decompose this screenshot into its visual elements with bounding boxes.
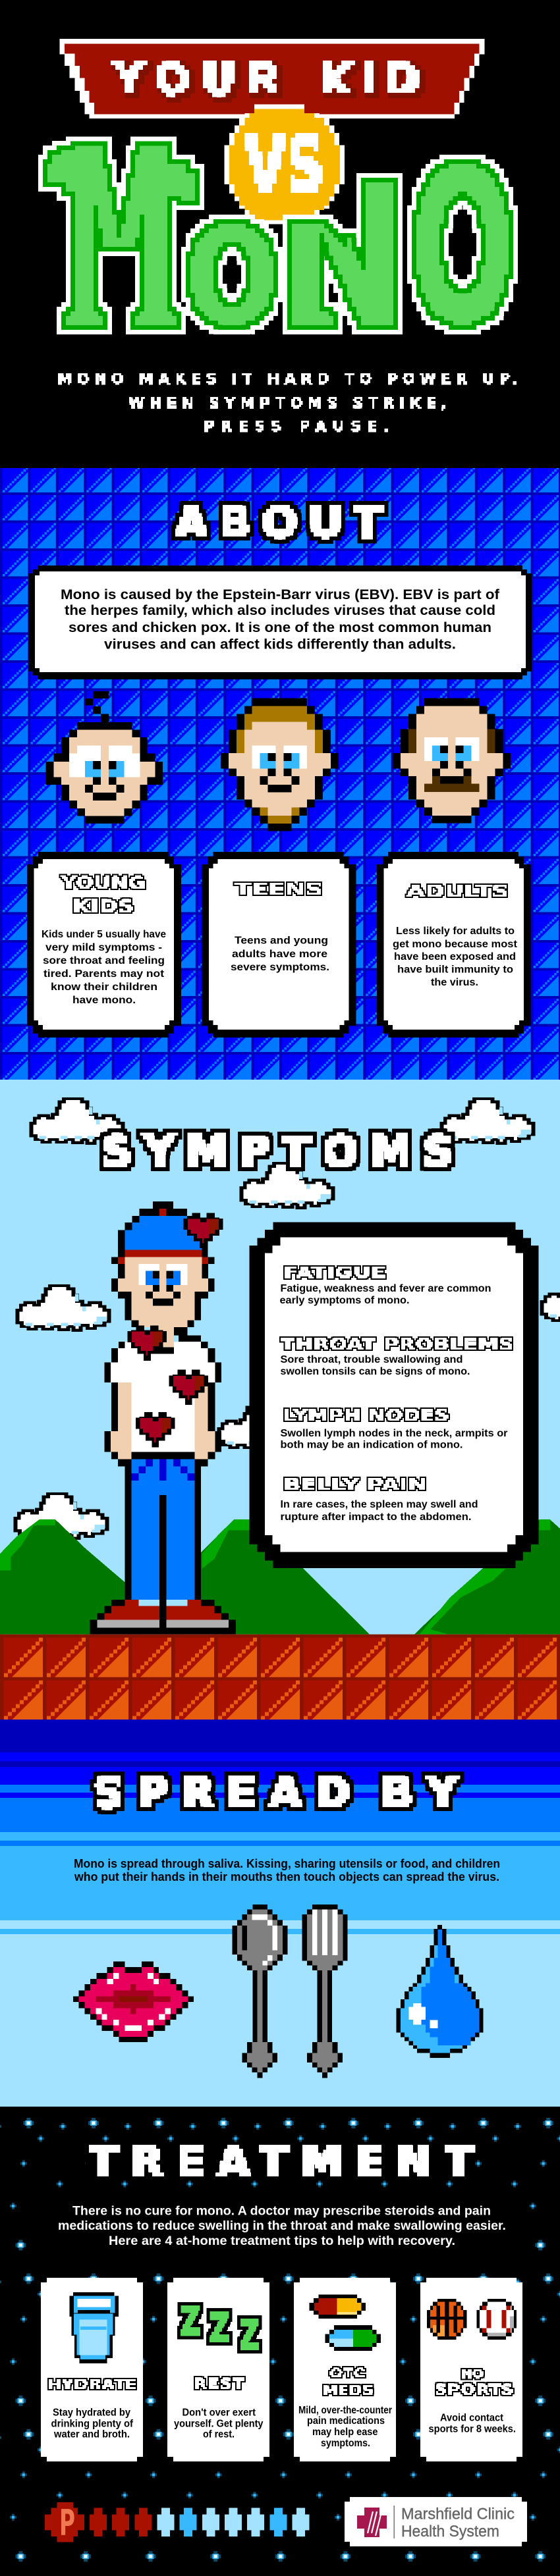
clouds bbox=[15, 1099, 560, 1538]
treatment paragraph: medications to reduce swelling in the throat and make swallowing easier. bbox=[58, 2219, 506, 2233]
adults text bbox=[393, 926, 518, 988]
otc meds text bbox=[298, 2405, 392, 2449]
symptom: belly pain: BELLY PAIN bbox=[283, 1475, 427, 1494]
panel: hydrate card bbox=[41, 2278, 143, 2461]
heading: young kids bbox=[61, 874, 146, 916]
heading: otc meds bbox=[322, 2366, 374, 2398]
icon: young kid face bbox=[45, 691, 163, 824]
icon: lips bbox=[73, 1962, 194, 2042]
symptom: belly pain: rupture after impact to the abdomen. bbox=[281, 1511, 472, 1523]
teens text bbox=[231, 935, 329, 973]
icon: hearts bbox=[128, 1213, 223, 1447]
icon: spoon bbox=[232, 1905, 287, 2078]
heading: young kids: YOUNG bbox=[61, 874, 146, 893]
teens text: severe symptoms. bbox=[231, 962, 329, 973]
otc meds text: pain medications bbox=[307, 2415, 385, 2427]
pause progress bar bbox=[40, 2498, 315, 2544]
about paragraph: the herpes family, which also includes viruses that cause cold bbox=[65, 603, 495, 618]
young kids text: tired. Parents may not bbox=[43, 968, 165, 980]
teens text: adults have more bbox=[232, 949, 327, 960]
hydrate text bbox=[51, 2407, 134, 2440]
symptom: lymph nodes bbox=[281, 1406, 507, 1451]
heading: your kid: YOUR bbox=[113, 55, 279, 103]
panel: rest card bbox=[167, 2278, 269, 2461]
panel: about background bbox=[0, 468, 560, 1080]
no sports text bbox=[428, 2412, 516, 2435]
hydrate text: Stay hydrated by bbox=[53, 2407, 130, 2419]
title banner bbox=[60, 39, 485, 118]
icon: marshfield cross bbox=[357, 2508, 387, 2537]
symptom: belly pain: In rare cases, the spleen may swell and bbox=[281, 1499, 478, 1510]
rest text: Don't over exert bbox=[182, 2407, 256, 2419]
heading: adults: ADULTS bbox=[406, 882, 509, 902]
young kids text: Kids under 5 usually have bbox=[42, 929, 166, 940]
hydrate text: drinking plenty of bbox=[51, 2419, 134, 2429]
panel: symptoms sky bbox=[0, 1080, 560, 1635]
logo wordmark: Health System bbox=[401, 2523, 499, 2540]
panel: symptoms list box bbox=[249, 1222, 538, 1568]
symptom: belly pain bbox=[281, 1475, 478, 1523]
adults text: Less likely for adults to bbox=[396, 926, 515, 937]
icon: zzz: Z bbox=[181, 2298, 200, 2344]
icon: baseball bbox=[477, 2299, 517, 2340]
otc meds text: Mild, over-the-counter bbox=[298, 2405, 392, 2416]
logo word: mono: N bbox=[277, 146, 410, 371]
young kids text: know their children bbox=[51, 982, 157, 993]
logo card: marshfield clinic health system bbox=[345, 2497, 527, 2546]
symptom: lymph nodes: both may be an indication of mono. bbox=[281, 1439, 462, 1451]
symptom: throat problems bbox=[281, 1335, 514, 1377]
heading: young kids: KIDS bbox=[72, 897, 134, 916]
teens text: Teens and young bbox=[235, 935, 328, 947]
heading: otc meds: MEDS bbox=[322, 2382, 374, 2398]
tagline: MONO MAKES IT HARD TO POWER UP. bbox=[57, 371, 518, 388]
vs coin bbox=[224, 104, 345, 224]
adults text: have built immunity to bbox=[397, 964, 513, 976]
brick ground bbox=[0, 1635, 560, 1720]
icon: teen face bbox=[221, 698, 339, 831]
heading: rest: REST bbox=[193, 2376, 245, 2392]
panel: teens card bbox=[202, 852, 356, 1038]
heading: teens: TEENS bbox=[235, 880, 323, 899]
icon: glass of water bbox=[70, 2292, 119, 2363]
young kids text bbox=[42, 929, 166, 1006]
rest text: of rest. bbox=[203, 2429, 235, 2440]
panel: about text box bbox=[28, 565, 532, 679]
heading: no sports: SPORTS bbox=[434, 2382, 514, 2398]
panel: treatment starfield bbox=[0, 2107, 560, 2576]
icon: fork bbox=[302, 1905, 347, 2078]
icon: zzz bbox=[181, 2298, 259, 2359]
panel: title section background bbox=[0, 0, 560, 469]
hydrate text: water and broth. bbox=[53, 2429, 130, 2440]
panel: otc meds card bbox=[294, 2278, 396, 2461]
icon: zzz: Z bbox=[239, 2313, 259, 2359]
heading: your kid bbox=[113, 55, 420, 103]
rest text: yourself. Get plenty bbox=[174, 2419, 264, 2429]
otc meds text: symptoms. bbox=[321, 2438, 370, 2449]
logo word: mono bbox=[38, 137, 518, 334]
rest text bbox=[174, 2407, 264, 2440]
symptom: fatigue bbox=[279, 1263, 491, 1306]
about paragraph: Mono is caused by the Epstein-Barr virus (EBV). EBV is part of bbox=[61, 587, 500, 602]
tagline: PRESS PAUSE. bbox=[204, 419, 389, 435]
logo wordmark: Marshfield Clinic bbox=[401, 2506, 515, 2523]
about paragraph bbox=[61, 587, 500, 652]
heading: no sports: NO bbox=[461, 2367, 484, 2381]
green hills bbox=[0, 1519, 560, 1635]
young kids text: very mild symptoms - bbox=[45, 942, 162, 953]
no sports text: Avoid contact bbox=[440, 2412, 503, 2423]
hat, head and body bbox=[90, 1201, 236, 1635]
icon: pills bbox=[309, 2295, 381, 2351]
adults text: have been exposed and bbox=[394, 951, 516, 962]
treatment paragraph: Here are 4 at-home treatment tips to help with recovery. bbox=[109, 2234, 455, 2248]
panel: spread by striped background bbox=[0, 1720, 560, 2107]
symptom: fatigue: Fatigue, weakness and fever are common bbox=[281, 1283, 491, 1294]
figure: sick kid with hearts bbox=[90, 1201, 236, 1635]
heading: spread by: SPREAD bbox=[94, 1769, 350, 1817]
adults text: get mono because most bbox=[393, 939, 518, 950]
vs coin: VS bbox=[244, 120, 325, 211]
tagline bbox=[57, 371, 518, 435]
icon: adult face bbox=[393, 698, 511, 823]
young kids text: have mono. bbox=[72, 995, 136, 1006]
icon: water drop bbox=[397, 1925, 483, 2058]
about paragraph: viruses and can affect kids differently than adults. bbox=[104, 637, 456, 652]
heading: no sports bbox=[434, 2367, 514, 2398]
heading: otc meds: OTC bbox=[329, 2366, 365, 2380]
symptom: throat problems: Sore throat, trouble swallowing and bbox=[281, 1354, 462, 1365]
heading: treatment: TREATMENT bbox=[90, 2138, 473, 2186]
spread by text bbox=[74, 1857, 500, 1883]
heading: hydrate: HYDRATE bbox=[47, 2377, 137, 2392]
logo wordmark bbox=[401, 2506, 515, 2540]
adults text: the virus. bbox=[431, 977, 478, 988]
heading: spread by: BY bbox=[381, 1769, 458, 1817]
logo word: mono: M bbox=[63, 99, 177, 382]
icon: basketball bbox=[427, 2299, 467, 2340]
logo word: mono: O bbox=[185, 200, 279, 354]
spread by text: who put their hands in their mouths then touch objects can spread the virus. bbox=[74, 1870, 499, 1883]
spread by text: Mono is spread through saliva. Kissing, sharing utensils or food, and children bbox=[74, 1857, 500, 1870]
panel: adults card bbox=[377, 852, 531, 1038]
heading: about: ABOUT bbox=[175, 498, 382, 546]
symptom: lymph nodes: Swollen lymph nodes in the neck, armpits or bbox=[281, 1428, 507, 1439]
symptom: throat problems: THROAT PROBLEMS bbox=[281, 1335, 514, 1354]
treatment paragraph: There is no cure for mono. A doctor may prescribe steroids and pain bbox=[72, 2205, 491, 2219]
symptom: fatigue: FATIGUE bbox=[283, 1263, 386, 1282]
icon: zzz: Z bbox=[210, 2305, 229, 2352]
panel: no sports card bbox=[420, 2278, 522, 2461]
symptom: throat problems: swollen tonsils can be signs of mono. bbox=[281, 1366, 470, 1377]
symptom: fatigue: early symptoms of mono. bbox=[279, 1295, 410, 1306]
otc meds text: may help ease bbox=[312, 2427, 378, 2438]
panel: young kids card bbox=[27, 852, 181, 1038]
heading: your kid: KID bbox=[319, 55, 420, 103]
young kids text: sore throat and feeling bbox=[43, 955, 165, 966]
tagline: WHEN SYMPTOMS STRIKE, bbox=[128, 396, 447, 412]
letter p: P bbox=[59, 2502, 75, 2544]
about paragraph: sores and chicken pox. It is one of the most common human bbox=[69, 620, 491, 635]
treatment paragraph bbox=[58, 2205, 506, 2248]
heading: symptoms: SYMPTOMS bbox=[102, 1128, 453, 1176]
no sports text: sports for 8 weeks. bbox=[428, 2424, 516, 2435]
symptom: lymph nodes: LYMPH NODES bbox=[283, 1406, 449, 1425]
